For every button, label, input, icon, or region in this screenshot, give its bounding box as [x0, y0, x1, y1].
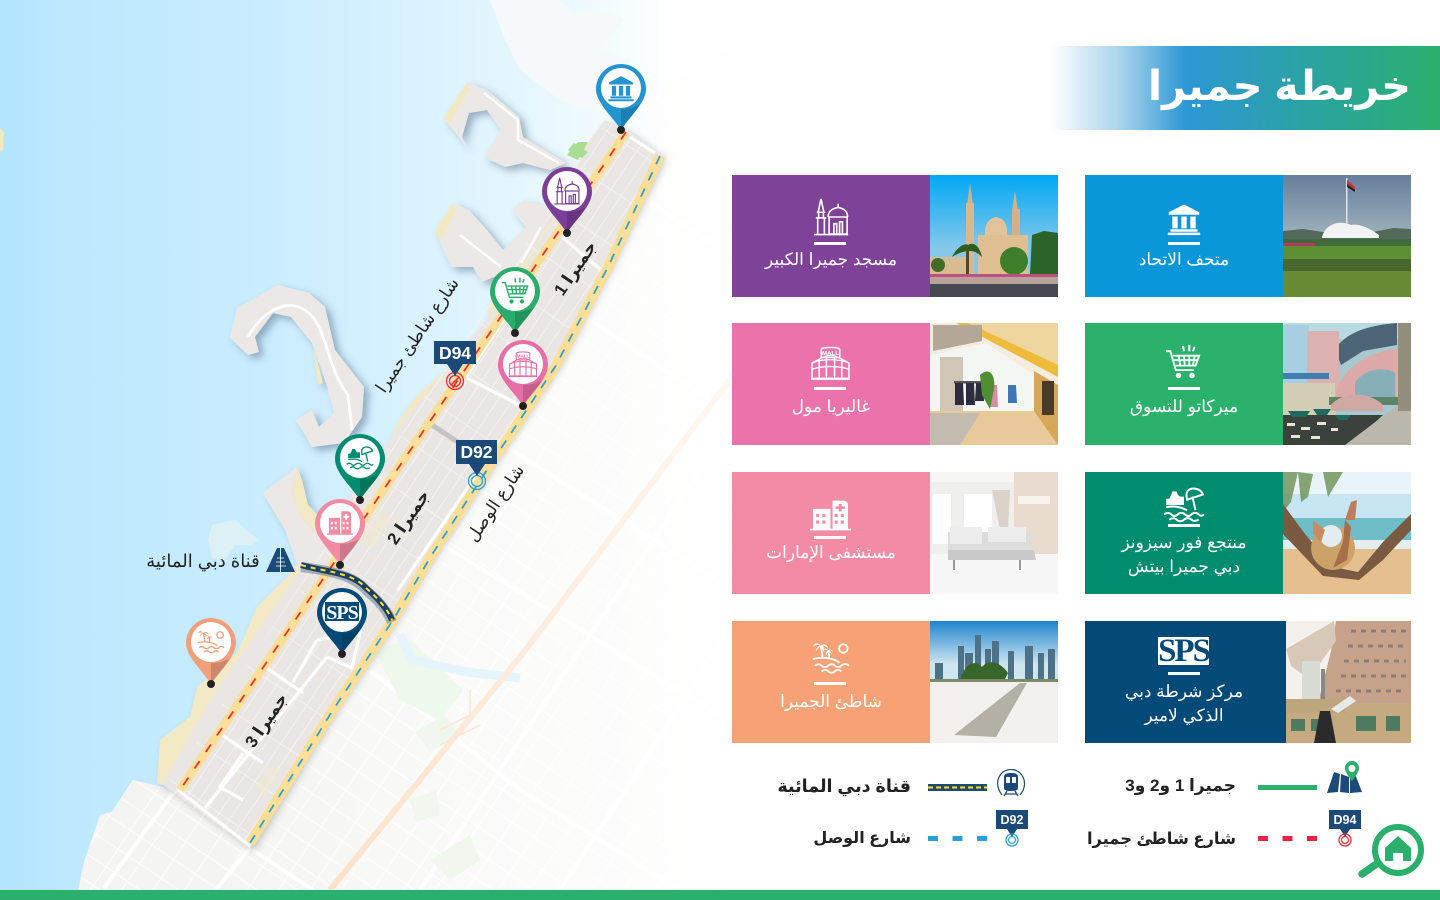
pin: Galleria Mall: [498, 340, 548, 410]
label: Jumeirah 2: جميرا 2: [383, 487, 434, 549]
legend line: red dashes: [1258, 836, 1317, 841]
label: Jumeirah 3: جميرا 3: [241, 690, 292, 752]
legend line: canal: [928, 784, 987, 791]
legend marker: D92: D92: [1001, 813, 1024, 827]
card label: الذكي لامير: [1144, 706, 1224, 725]
legend icon: train: [997, 769, 1025, 796]
pin: Mercato: [490, 267, 540, 337]
card: Jumeirah Mosque: [732, 175, 1058, 297]
legend marker: D94: D94: [1334, 813, 1357, 827]
legend text: Jumeirah 1,2,3: جميرا 1 و2 و3: [1125, 776, 1236, 795]
card label: [1125, 682, 1243, 726]
card: Four Seasons resort: [1085, 472, 1411, 594]
card label: دبي جميرا بيتش: [1128, 557, 1240, 576]
faint canal island: [208, 520, 258, 560]
pin: Emirates Hospital: [315, 499, 365, 569]
photo: museum flag and lawn: [1283, 175, 1411, 297]
card: SPS police station: [1085, 621, 1411, 743]
label: Jumeirah Beach Road: شارع شاطئ جميرا: [372, 274, 464, 397]
legend text: Dubai Water Canal: قناة دبي المائية: [777, 776, 911, 796]
faint top island: [490, 0, 630, 110]
card label: منتجع فور سيزونز: [1121, 533, 1247, 552]
Jumeirah strip land: [157, 120, 662, 848]
card label: ميركاتو للتسوق: [1130, 397, 1238, 416]
card label: مركز شرطة دبي: [1125, 682, 1243, 701]
island 2: [435, 200, 575, 282]
label: Dubai Water Canal: قناة دبي المائية: [146, 551, 260, 572]
card: Jumeirah Beach: [732, 621, 1058, 743]
D92 marker: [456, 440, 497, 490]
logo: magnifier with house: [1358, 824, 1424, 878]
pin: Four Seasons resort: [335, 434, 385, 504]
card: Emirates Hospital: [732, 472, 1058, 594]
legend line: green: [1258, 785, 1317, 790]
legend line: blue dashes: [928, 836, 987, 841]
sand sliver at left edge: [0, 128, 4, 152]
island 3: [230, 285, 364, 447]
card label: مستشفى الإمارات: [766, 543, 896, 562]
legend marker: D92: [996, 810, 1028, 847]
photo: hospital ward: [930, 472, 1058, 570]
photo: police station tower: [1286, 621, 1411, 743]
card label: غاليريا مول: [792, 397, 870, 416]
pin: Jumeirah Beach: [186, 618, 236, 688]
label: Al Wasl Road: شارع الوصل: [463, 461, 529, 546]
card label: [1120, 533, 1247, 576]
icon: canal bridge: [266, 548, 295, 572]
Dubai Water Canal line: [301, 565, 392, 622]
photo: hammock on beach: [1283, 472, 1411, 594]
sea: [0, 0, 700, 900]
title text: خريطة جميرا: [1148, 62, 1411, 109]
legend text: Al Wasl Road: شارع الوصل: [813, 830, 911, 847]
photo: Mercato interior: [1283, 323, 1411, 445]
card label: مسجد جميرا الكبير: [765, 250, 897, 269]
legend icon: map pin: [1327, 761, 1362, 793]
island 1: [444, 82, 566, 170]
photo: mosque: [930, 175, 1058, 297]
legend text: Jumeirah Beach Road: شارع شاطئ جميرا: [1087, 830, 1236, 848]
pin: Etihad Museum: [596, 64, 646, 134]
pin: SPS police station: [317, 588, 367, 658]
legend marker: D94: [1329, 810, 1361, 847]
card: Etihad Museum: [1085, 175, 1411, 297]
street blocks: [165, 122, 662, 848]
label: Jumeirah 1: جميرا 1: [550, 238, 601, 300]
card label: متحف الاتحاد: [1139, 250, 1229, 269]
D92 marker: D92: [460, 442, 493, 462]
D94 marker: D94: [439, 343, 471, 363]
bottom bar: [0, 890, 1440, 900]
Al Wasl road: [250, 156, 660, 843]
card label: شاطئ الجميرا: [780, 692, 882, 711]
pin: SPS police station: SPS: [326, 602, 359, 624]
photo: clothes store: [930, 323, 1058, 445]
pale surrounding land: [76, 0, 1000, 900]
title banner: [1050, 46, 1440, 130]
Jumeirah Beach road: [180, 132, 626, 790]
D94 marker: [434, 341, 476, 390]
legend: [777, 761, 1362, 848]
pin: Jumeirah Mosque: [542, 167, 592, 237]
card: Galleria Mall: [732, 323, 1058, 445]
card: Mercato: [1085, 323, 1411, 445]
photo: Dubai beach skyline: [930, 621, 1058, 743]
